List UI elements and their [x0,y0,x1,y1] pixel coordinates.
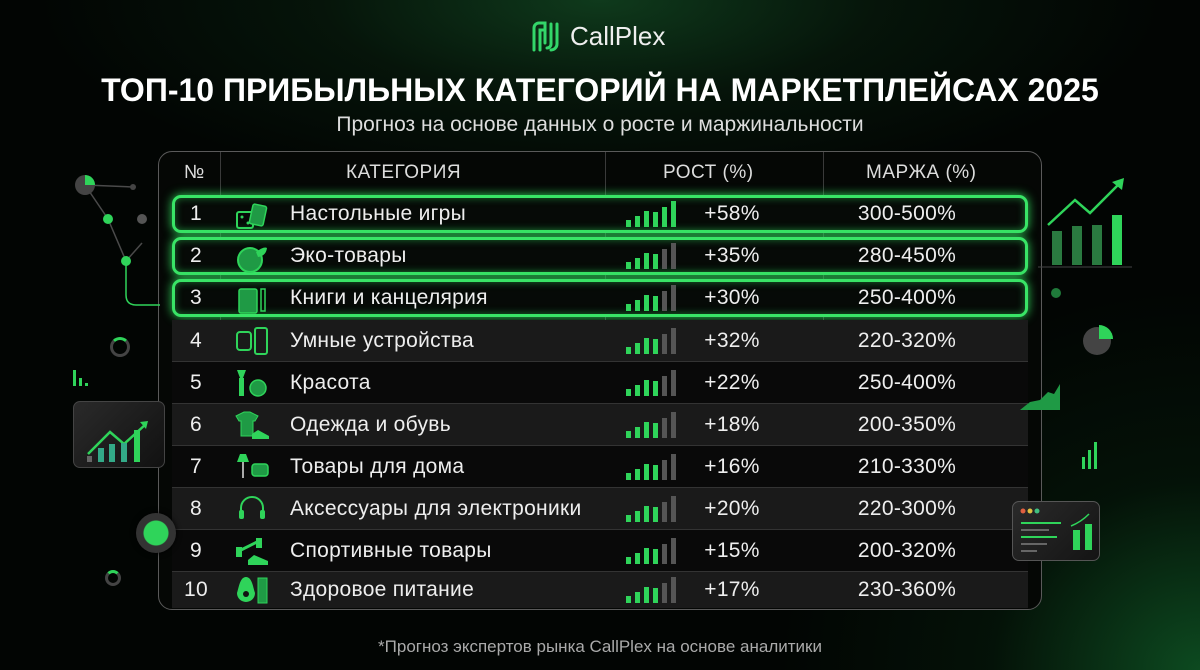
row 2: 280-450% [858,244,956,267]
decoration: pie left bottom [136,513,176,553]
row 9: +15% [704,538,760,562]
table header: РОСТ (%) [663,162,754,183]
row 9: Спортивные товары [290,538,492,562]
row 1: 300-500% [858,202,956,225]
row 5: Красота [290,370,371,394]
row 4 [172,320,1028,362]
row 10: +17% [704,578,760,601]
row 4: 4 [190,328,202,352]
decoration: area chart right [1020,384,1060,410]
row 8 [172,488,1028,530]
row 5: 5 [190,370,202,394]
table header [184,162,977,183]
decoration: small rings [110,337,130,357]
row 6 [172,404,1028,446]
row 10: Здоровое питание [290,578,474,601]
row 2 [172,237,1028,275]
row 7: +16% [704,454,760,478]
row 8: +20% [704,496,760,520]
row 5 [172,362,1028,404]
row 6: +18% [704,412,760,436]
footnote: *Прогноз экспертов рынка CallPlex на основе аналитики [378,637,822,656]
row 7 [172,446,1028,488]
row 4: Умные устройства [290,328,474,352]
table header: № [184,162,205,183]
row 4: 220-320% [858,328,956,352]
row 8: Аксессуары для электроники [290,496,582,520]
row 2: Эко-товары [290,244,407,267]
row 8: 8 [190,496,202,520]
row 10: 10 [184,578,208,601]
row 1: 1 [190,202,202,225]
row 9: 200-320% [858,538,956,562]
row 7: Товары для дома [290,454,464,478]
row 6: Одежда и обувь [290,412,451,436]
decoration: small bars right [1082,442,1097,469]
row 7: 7 [190,454,202,478]
table header: МАРЖА (%) [866,162,977,183]
icon card: growth chart left [73,401,165,468]
row 6: 6 [190,412,202,436]
icon card: dashboard right [1012,501,1100,561]
row 5: +22% [704,370,760,394]
decoration: left network [75,175,160,306]
title: ТОП-10 ПРИБЫЛЬНЫХ КАТЕГОРИЙ НА МАРКЕТПЛЕЙСАХ 2025 [101,72,1099,108]
row 3: 3 [190,286,202,309]
row 3 [172,279,1028,317]
row 8: 220-300% [858,496,956,520]
row 4: +32% [704,328,760,352]
row 2: 2 [190,244,202,267]
row 1: +58% [704,202,760,225]
row 6: 200-350% [858,412,956,436]
row 3: 250-400% [858,286,956,309]
row 3: Книги и канцелярия [290,286,488,309]
column dividers [220,152,221,608]
subtitle: Прогноз на основе данных о росте и маржинальности [336,113,864,136]
decoration: small bar icon left [73,370,88,386]
decoration: pie right [1083,325,1113,355]
decoration: right growth chart [1038,178,1132,268]
row 7: 210-330% [858,454,956,478]
logo: CallPlex [570,21,665,51]
table header: КАТЕГОРИЯ [346,162,461,183]
row 9: 9 [190,538,202,562]
row 2: +35% [704,244,760,267]
row 1: Настольные игры [290,202,466,225]
row 10: 230-360% [858,578,956,601]
row 5: 250-400% [858,370,956,394]
row 10 [172,572,1028,608]
row 3: +30% [704,286,760,309]
row 1 [172,195,1028,233]
row 9 [172,530,1028,572]
panel: table [158,151,1042,610]
